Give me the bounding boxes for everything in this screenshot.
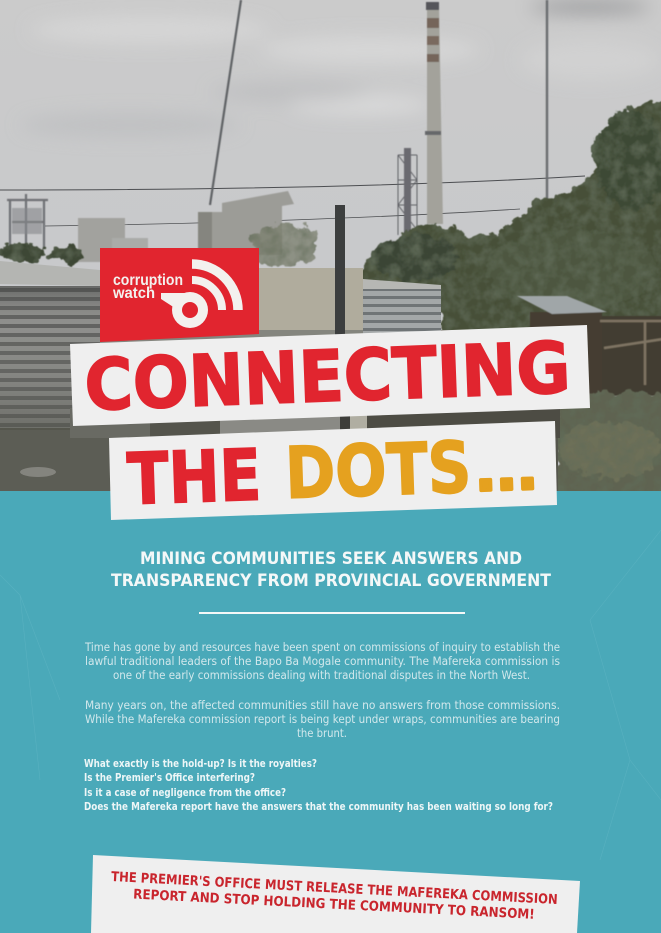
tall poles [210,0,547,205]
body paragraph 2: While the Mafereka commission report is being kept under wraps, communities are bearing [85,713,560,726]
logo wordmark [112,272,183,302]
title banner: CONNECTING: CONNECTING [83,326,572,427]
left corrugated shed [0,261,100,432]
divider [199,612,465,614]
logo wordmark: corruption [113,272,183,289]
body paragraph 2: Many years on, the affected communities still have no answers from those commissions. [85,699,560,712]
left shrubs [0,223,319,267]
lattice tower [398,148,417,236]
body paragraph 1 [84,641,560,682]
right hut and fence [517,296,661,402]
trees [357,95,661,340]
questions list: Is the Premier's Office interfering? [84,771,255,784]
call to action text: THE PREMIER'S OFFICE MUST RELEASE THE MAFEREKA COMMISSION [111,869,558,908]
call to action text: REPORT AND STOP HOLDING THE COMMUNITY TO RANSOM! [133,887,535,923]
title word: DOTS: DOTS [284,426,472,515]
body paragraph 2: the brunt. [297,727,347,740]
title word: THE: THE [126,434,262,521]
subtitle heading: TRANSPARENCY FROM PROVINCIAL GOVERNMENT [111,571,551,591]
questions list: What exactly is the hold-up? Is it the royalties? [84,757,317,770]
chimney stack [425,2,443,224]
body paragraph 1: Time has gone by and resources have been spent on commissions of inquiry to establish the [84,641,560,654]
logo wordmark: watch [112,285,155,302]
concrete wall [100,268,430,430]
background photo: industrial mine site [0,0,661,512]
middle corrugated shed [363,279,441,334]
body paragraph 1: lawful traditional leaders of the Bapo Ba Mogale community. The Mafereka commission is [85,655,560,668]
title banner: THE DOTS [109,421,557,521]
dark pole [335,205,345,340]
lower right vegetation [556,392,661,512]
logo: Corruption Watch [100,248,259,342]
body paragraph 2 [85,699,560,740]
refinery structures [7,191,294,262]
questions list [84,757,553,813]
questions list: Does the Mafereka report have the answers that the community has been waiting so long for? [84,800,553,813]
body paragraph 1: one of the early commissions dealing with traditional disputes in the North West. [113,669,530,682]
logo whistle icon [161,264,238,328]
title ellipsis: ... [474,437,539,503]
questions list: Is it a case of negligence from the office? [84,786,286,799]
call to action panel [91,855,580,933]
power lines [0,176,585,226]
teal panel background [0,491,661,933]
subtitle heading: MINING COMMUNITIES SEEK ANSWERS AND [140,549,522,569]
ground vegetation [0,408,560,491]
subtitle heading [111,549,551,591]
